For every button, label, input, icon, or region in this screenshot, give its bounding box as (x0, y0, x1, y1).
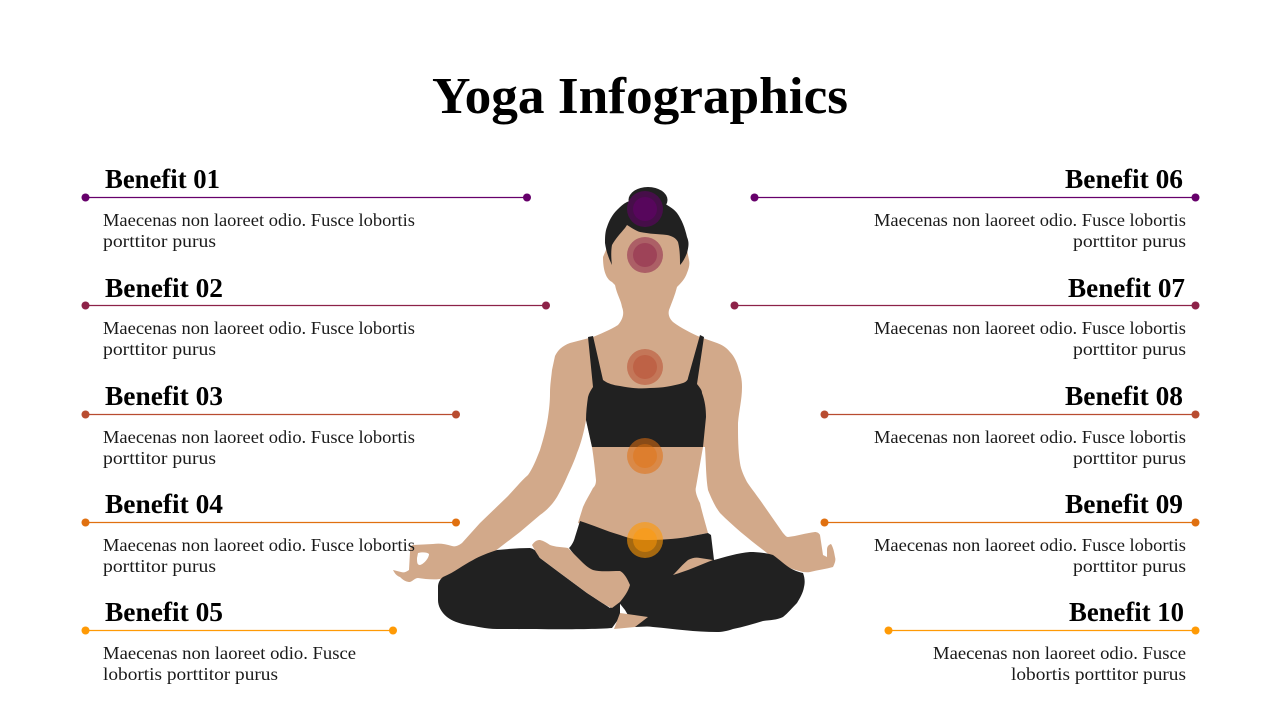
benefit 04: porttitor purus (103, 556, 216, 576)
benefit 05: Maecenas non laoreet odio. Fusce (103, 643, 356, 663)
benefit 06: Maecenas non laoreet odio. Fusce lobortis (874, 210, 1186, 230)
benefit 07: Maecenas non laoreet odio. Fusce lobortis (874, 318, 1186, 338)
benefit 01: Maecenas non laoreet odio. Fusce lobortis (103, 210, 415, 230)
benefit 04: Benefit 04 (105, 489, 223, 519)
benefit 02: porttitor purus (103, 339, 216, 359)
benefit 09: porttitor purus (1073, 556, 1186, 576)
title: Yoga Infographics (432, 68, 848, 125)
benefit 06 (750, 164, 1200, 251)
chakra 3 (627, 349, 663, 385)
benefit 10 (884, 597, 1200, 684)
benefit 04 (82, 489, 460, 576)
benefit 01: Benefit 01 (105, 164, 220, 194)
left foot (532, 540, 630, 608)
chakra 1 (627, 191, 663, 227)
benefit 01: porttitor purus (103, 231, 216, 251)
benefit 03: Maecenas non laoreet odio. Fusce lobortis (103, 427, 415, 447)
benefit 08: Benefit 08 (1065, 381, 1183, 411)
body skin (393, 210, 835, 582)
shorts and right leg (569, 521, 805, 632)
benefit 07: Benefit 07 (1068, 273, 1185, 303)
benefit 10: Benefit 10 (1069, 597, 1184, 627)
benefit 05: lobortis porttitor purus (103, 664, 278, 684)
right foot (673, 558, 713, 575)
benefit 07 (730, 273, 1200, 359)
benefit 02 (82, 273, 550, 359)
benefit 05: Benefit 05 (105, 597, 223, 627)
benefit 07: porttitor purus (1073, 339, 1186, 359)
benefit 09: Maecenas non laoreet odio. Fusce lobortis (874, 535, 1186, 555)
chakra 5 (627, 522, 663, 558)
benefit 03: Benefit 03 (105, 381, 223, 411)
benefit 08: Maecenas non laoreet odio. Fusce lobortis (874, 427, 1186, 447)
chakra 2 (627, 237, 663, 273)
lower foot (614, 613, 648, 629)
benefit 02: Maecenas non laoreet odio. Fusce lobortis (103, 318, 415, 338)
sports bra (586, 335, 706, 447)
benefit 01 (82, 164, 531, 251)
benefit 10: Maecenas non laoreet odio. Fusce (933, 643, 1186, 663)
chakra 4 (627, 438, 663, 474)
benefit 03 (82, 381, 460, 468)
benefit 03: porttitor purus (103, 448, 216, 468)
benefit 10: lobortis porttitor purus (1011, 664, 1186, 684)
figure: seated yoga woman (393, 187, 835, 632)
benefit 02: Benefit 02 (105, 273, 223, 303)
left leg (438, 548, 620, 629)
hair bun (628, 187, 668, 213)
benefit 06: porttitor purus (1073, 231, 1186, 251)
hair (605, 199, 688, 265)
benefit 04: Maecenas non laoreet odio. Fusce lobortis (103, 535, 415, 555)
benefit 09 (820, 489, 1200, 576)
benefit 08 (820, 381, 1200, 468)
benefit 06: Benefit 06 (1065, 164, 1183, 194)
benefit 05 (82, 597, 397, 684)
benefit 08: porttitor purus (1073, 448, 1186, 468)
finger loop hole (417, 552, 429, 565)
benefit 09: Benefit 09 (1065, 489, 1183, 519)
